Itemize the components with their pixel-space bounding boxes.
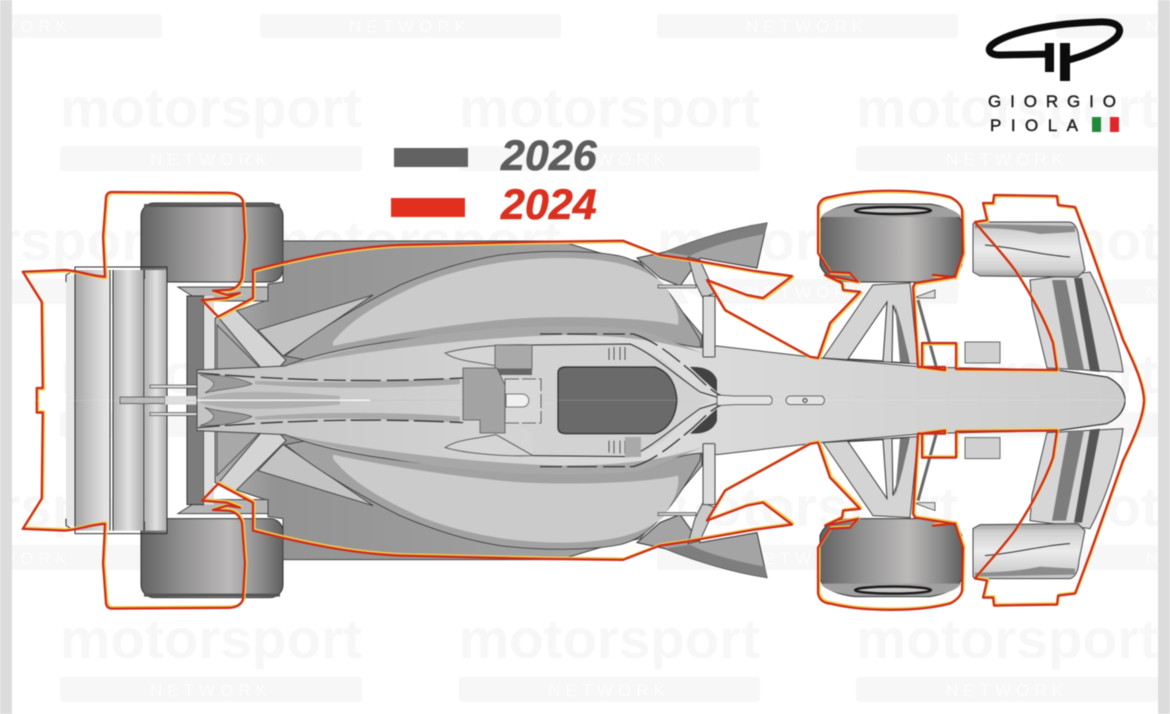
sidepod mid band (285, 326, 705, 366)
watermark pattern: motorsport (459, 607, 760, 670)
rear spine detail (198, 373, 463, 404)
body centre (197, 330, 1125, 404)
floor (215, 241, 702, 404)
front wing main elements (1030, 272, 1123, 372)
watermark pattern: motorsport (657, 209, 958, 272)
legend: 2026: 2026 (500, 132, 598, 180)
legend: 2024: 2024 (500, 181, 597, 229)
cockpit outer dashes (540, 334, 722, 396)
watermark pattern: motorsport (60, 76, 362, 139)
sidepod light surface (333, 258, 678, 346)
front tyre (820, 204, 962, 282)
2024 outline: yellow underline (24, 192, 1145, 403)
rear diffuser struts (120, 385, 197, 405)
front wing flap (973, 222, 1085, 277)
engine rear wing fin (637, 223, 767, 286)
watermark pattern: NETWORK (946, 681, 1068, 700)
watermark pattern: NETWORK (150, 150, 272, 169)
floor edge vane (703, 296, 715, 357)
front suspension (823, 283, 936, 366)
right grey edge (1158, 0, 1170, 714)
car: mirrored lower half (23, 396, 1145, 610)
gap between floor and vane (682, 290, 702, 332)
watermark pattern: motorsport (856, 607, 1158, 670)
watermark pattern: motorsport (60, 342, 362, 405)
rear wing (66, 267, 167, 404)
nose-side block (965, 342, 1000, 363)
block behind cockpit (495, 345, 532, 369)
logo: Giorgio Piola (988, 22, 1120, 135)
rear beam (187, 296, 204, 404)
sidepod upper dark band (285, 251, 702, 366)
watermark pattern: motorsport (856, 76, 1158, 139)
exhaust (506, 394, 529, 407)
nose slot pin (803, 398, 807, 402)
nose slot (785, 396, 825, 404)
rear triangle panel (217, 325, 262, 370)
watermark pattern: NETWORK (746, 549, 868, 568)
legend: 2024 (391, 181, 597, 229)
fin dark band (665, 223, 767, 256)
cockpit surround lines (533, 344, 720, 398)
cockpit opening (558, 367, 677, 404)
watermark pattern: NETWORK (548, 150, 670, 169)
nose tip (717, 395, 772, 404)
spine centre highlight (197, 399, 370, 401)
engine cover leaf (445, 345, 533, 366)
diagonal suspension arm (218, 309, 286, 369)
fin strut (658, 285, 696, 288)
watermark pattern: motorsport (60, 607, 362, 670)
nose top edge (1057, 370, 1125, 398)
halo detail (609, 347, 625, 360)
2024 outline: red (23, 191, 1144, 402)
logo: Giorgio Piola: PIOLA (990, 116, 1079, 135)
airbox block (463, 368, 505, 433)
left grey edge (0, 0, 12, 714)
watermark pattern: NETWORK (548, 681, 670, 700)
dark nose chassis area (690, 367, 717, 392)
car: 2026 top half (mirrored below) (23, 191, 1145, 405)
watermark pattern: motorsport (856, 342, 1158, 405)
watermark pattern: NETWORK (946, 150, 1068, 169)
legend: 2026 (394, 132, 598, 180)
rear tyre (141, 203, 283, 282)
logo: Giorgio Piola: GIORGIO (988, 92, 1116, 111)
block shadow (497, 369, 532, 375)
sidepod lower panel (258, 295, 373, 356)
lower cockpit block (625, 437, 641, 457)
watermark pattern: motorsport (260, 209, 561, 272)
watermark pattern: NETWORK (746, 17, 868, 36)
watermark pattern: motorsport (459, 76, 760, 139)
cockpit surround (632, 348, 709, 449)
mirror mount (505, 379, 541, 423)
watermark pattern: NETWORK (150, 681, 272, 700)
watermark pattern: NETWORK (349, 17, 471, 36)
watermark pattern: NETWORK (746, 283, 868, 302)
watermark pattern: motorsport (657, 475, 958, 538)
rear suspension fairing (178, 287, 268, 301)
floor edge panel (688, 257, 715, 298)
